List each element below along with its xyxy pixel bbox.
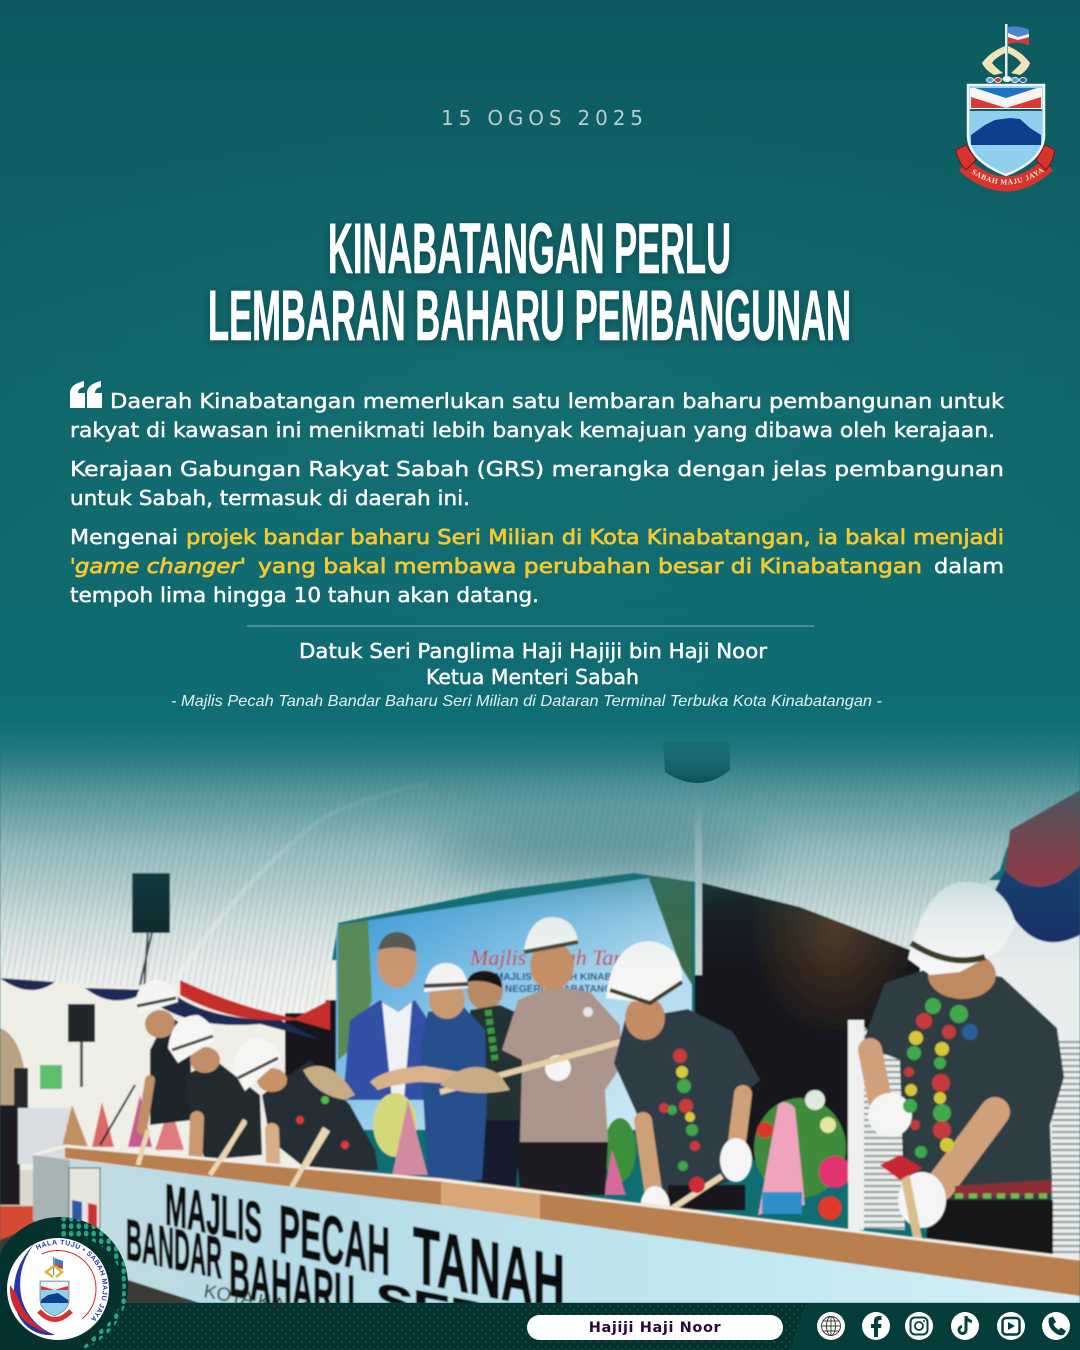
guest bending 2 <box>168 1015 262 1180</box>
paragraph 3: yang bakal membawa perubahan besar di Kinabatangan <box>258 554 922 578</box>
dark curtain <box>695 870 920 1160</box>
flowers and basket right <box>373 1090 851 1220</box>
chief minister right <box>862 882 1064 1276</box>
paragraph 3 <box>70 525 1004 607</box>
paragraph 3: ' <box>70 554 76 578</box>
banner lettering: KOTA KINABATANGAN <box>202 1281 403 1337</box>
gift baskets left <box>62 1085 184 1150</box>
date: 15 OGOS 2025 <box>441 106 643 130</box>
ground and carpet left <box>0 1170 220 1303</box>
white wall right <box>880 880 1080 1180</box>
banner lettering: PECAH <box>279 1191 390 1290</box>
sandbox wood rim <box>33 1122 1080 1300</box>
paragraph 2 <box>70 457 1004 510</box>
stage screen: MAJLIS DAERAH KINABATANGAN <box>495 972 660 983</box>
sandbox banner face <box>32 1154 1080 1303</box>
paragraph 3: game changer' <box>75 554 246 578</box>
photo top fade into teal <box>0 720 1080 970</box>
minister centre right <box>606 941 760 1234</box>
shield <box>968 85 1044 175</box>
icon: tiktok <box>951 1312 979 1340</box>
crest ovals <box>986 76 1026 82</box>
attribution: Datuk Seri Panglima Haji Hajiji bin Haji Noor <box>299 639 768 663</box>
icon: web <box>817 1312 845 1340</box>
quote body <box>70 389 1004 607</box>
pole <box>695 785 702 975</box>
paragraph 3: tempoh lima hingga 10 tahun akan datang. <box>70 583 539 607</box>
paragraph 1: Daerah Kinabatangan memerlukan satu lembaran baharu pembangunan untuk <box>110 389 1004 413</box>
banner emblem <box>69 1168 100 1228</box>
event photo: groundbreaking ceremony <box>0 720 1080 1348</box>
stage screen <box>336 868 692 1130</box>
paragraph 3: Mengenai <box>70 525 178 549</box>
guest in beige shirt <box>440 917 622 1195</box>
stage screen: K NEGERI KINABATANGAN <box>495 984 626 995</box>
dark under-tent <box>284 999 338 1078</box>
valance swags <box>0 790 1080 1040</box>
icon: instagram <box>905 1312 933 1340</box>
banner lettering <box>126 1183 564 1303</box>
crest arms <box>982 46 1030 75</box>
attribution: Ketua Menteri Sabah <box>426 665 639 689</box>
tent ceiling <box>0 720 1080 1013</box>
badge white circle: HALA TUJU • SABAH MAJU JAYA <box>36 1240 108 1321</box>
stage screen: Majlis Pecah Tanah <box>469 945 646 970</box>
paragraph 2: untuk Sabah, termasuk di daerah ini. <box>70 486 470 510</box>
paragraph 2: Kerajaan Gabungan Rakyat Sabah (GRS) merangka dengan jelas pembangunan <box>70 457 1004 481</box>
icon: phone <box>1042 1312 1070 1340</box>
divider <box>247 625 814 627</box>
motto ribbon <box>956 144 1056 192</box>
hanging fixture <box>663 742 730 783</box>
name pill <box>527 1315 783 1340</box>
banner lettering: SERI <box>376 1274 506 1348</box>
name pill: Hajiji Haji Noor <box>589 1320 722 1336</box>
headline <box>208 210 851 356</box>
guest bending 3 <box>234 1038 378 1172</box>
Sabah coat of arms <box>956 24 1056 192</box>
banner lettering: MAJLIS <box>165 1173 262 1257</box>
flag <box>1005 24 1029 76</box>
air cooler grilles <box>848 1020 1080 1265</box>
paragraph 1 <box>70 389 1004 442</box>
paragraph 3: projek bandar baharu Seri Milian di Kota Kinabatangan, ia bakal menjadi <box>186 525 1004 549</box>
social icons <box>817 1312 1070 1340</box>
table and greenery background <box>18 1065 70 1164</box>
attribution <box>171 639 882 710</box>
backdrop behind tent <box>0 958 338 1184</box>
attribution: - Majlis Pecah Tanah Bandar Baharu Seri Milian di Dataran Terminal Terbuka Kota Kinabatangan - <box>171 693 882 710</box>
small speaker <box>68 1004 95 1087</box>
paragraph 3: dalam <box>934 554 1004 578</box>
motto ribbon: SABAH MAJU JAYA <box>972 168 1044 184</box>
icon: youtube <box>997 1312 1025 1340</box>
quote mark icon <box>70 381 102 408</box>
paragraph 1: rakyat di kawasan ini menikmati lebih banyak kemajuan yang dibawa oleh kerajaan. <box>70 418 995 442</box>
icon: facebook <box>862 1312 890 1340</box>
badge emblem <box>39 1257 71 1320</box>
guest bending 1 <box>135 980 192 1130</box>
guest behind in vest <box>467 970 522 1190</box>
speaker on tripod <box>132 873 170 990</box>
badge dark disc <box>0 1217 128 1350</box>
banner lettering: BANDAR <box>126 1208 222 1291</box>
far left guest <box>0 1028 28 1205</box>
banner lettering: TANAH <box>413 1211 565 1329</box>
campaign badge <box>0 1217 128 1350</box>
guest in blue <box>370 963 487 1180</box>
footer bar <box>0 1303 1080 1350</box>
